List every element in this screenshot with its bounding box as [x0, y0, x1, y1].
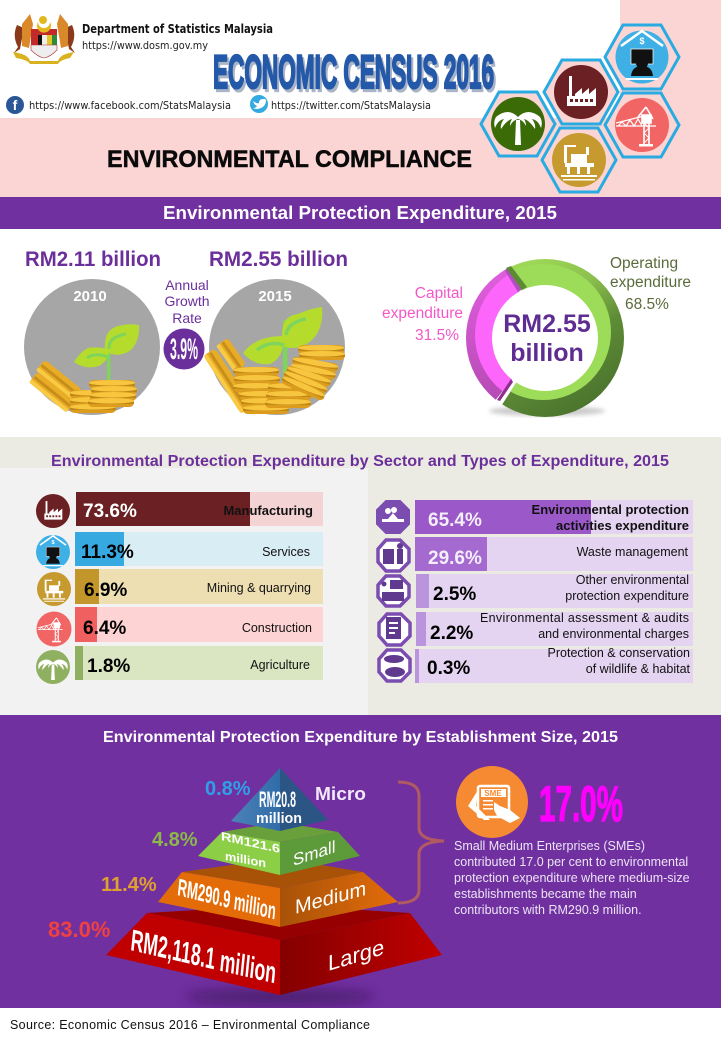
text block: SME summary: establishments became the main	[454, 887, 637, 901]
label: operating expenditure: Operating	[610, 255, 678, 272]
panel: 2010 expenditure	[24, 248, 161, 415]
callout: annual growth rate	[164, 277, 210, 370]
icon: services hexagon	[605, 25, 679, 89]
bar: environmental protection activities: activities expenditure	[556, 518, 689, 533]
bar: other environmental protection: protection expenditure	[565, 589, 689, 603]
panel: 2015 expenditure: 2015	[258, 288, 292, 305]
label: micro: Micro	[315, 784, 366, 804]
bar: agriculture: 1.8%	[87, 656, 130, 677]
icon: palm hexagon	[481, 92, 555, 156]
icon: coins 2010	[29, 359, 137, 413]
bar: manufacturing: 73.6%	[83, 501, 137, 522]
bar: assessment audits and charges	[379, 611, 693, 646]
pyramid tier: micro: RM20.8	[259, 787, 296, 812]
donut centre label: billion	[510, 339, 584, 367]
pyramid tier: micro: million	[256, 810, 302, 827]
text block: SME summary	[454, 839, 690, 917]
icon: SME tablet: SME	[484, 789, 502, 798]
text block: SME summary: contributed 17.0 per cent to environmental	[454, 855, 688, 869]
bar: construction: 6.4%	[83, 618, 126, 639]
text: department name	[82, 22, 273, 52]
source note: Source: Economic Census 2016 – Environmental Compliance	[10, 1018, 370, 1032]
chart: expenditure by sector	[36, 492, 323, 684]
label: operating expenditure: 68.5%	[625, 296, 669, 313]
bar: environmental protection activities	[377, 500, 693, 534]
pyramid tier: small: RM121.6	[221, 829, 280, 856]
bar: waste management: Waste management	[577, 545, 689, 559]
callout: annual growth rate: Growth	[164, 293, 210, 309]
bar: services: Services	[262, 545, 310, 559]
pyramid tier: micro	[231, 768, 328, 831]
bar: manufacturing	[36, 492, 323, 528]
bar: agriculture	[36, 646, 323, 684]
donut segment: capital expenditure	[466, 269, 520, 400]
bar: mining and quarrying	[37, 569, 323, 606]
label: operating expenditure	[610, 255, 691, 313]
pyramid tier: large	[106, 905, 442, 995]
text block: SME summary: protection expenditure where medium-size	[454, 871, 690, 885]
background: header white and pink	[0, 0, 721, 437]
title: Economic Census 2016	[213, 45, 496, 101]
text: facebook url: https://www.facebook.com/StatsMalaysia	[29, 99, 231, 112]
label: percent small: 4.8%	[152, 829, 198, 851]
label: percent large: 83.0%	[48, 917, 110, 942]
arrow: brace grouping SMEs	[398, 782, 444, 903]
pyramid tier: small: Small	[293, 836, 335, 870]
label: percent micro: 0.8%	[205, 778, 251, 800]
icon: facebook: f	[13, 97, 18, 113]
panel: establishment size background	[0, 715, 721, 1008]
text block: SME summary: contributors with RM290.9 million.	[454, 903, 642, 917]
chart: pyramid by establishment size	[48, 768, 442, 1005]
icon: sprout 2015	[243, 307, 322, 380]
panel: 2015 expenditure: RM2.55 billion	[209, 248, 348, 271]
icon: sprout 2010	[74, 324, 139, 385]
bar: other environmental protection: Other environmental	[576, 573, 689, 587]
callout: annual growth rate: Rate	[172, 310, 202, 326]
bar: manufacturing: Manufacturing	[223, 503, 313, 518]
bar: agriculture: Agriculture	[250, 658, 310, 672]
bar: assessment audits and charges: and environmental charges	[538, 627, 689, 641]
text block: SME summary: Small Medium Enterprises (SMEs)	[454, 839, 645, 853]
bar: other environmental protection	[378, 573, 693, 608]
panel: 2010 expenditure: RM2.11 billion	[25, 248, 161, 271]
text: department name: Department of Statistics Malaysia	[82, 22, 273, 36]
chart: expenditure by type	[377, 500, 693, 683]
heading: by sector and types: Environmental Protection Expenditure by Sector and Types of Expenditure, 2015	[51, 453, 669, 470]
icon: facebook	[6, 96, 24, 114]
bar: waste management: 29.6%	[428, 548, 482, 569]
bar: construction: Construction	[242, 621, 312, 635]
bar: wildlife and habitat	[379, 646, 693, 683]
callout: annual growth rate: Annual	[165, 277, 209, 293]
donut centre label: RM2.55	[503, 310, 591, 338]
pyramid tier: small	[198, 822, 360, 875]
label: capital expenditure: 31.5%	[415, 327, 459, 344]
bar: environmental protection activities: 65.4%	[428, 510, 482, 531]
heading: by establishment size: Environmental Protection Expenditure by Establishment Size, 2015	[103, 729, 618, 746]
bar: construction	[36, 607, 323, 646]
banner: Environmental Protection Expenditure, 2015	[0, 197, 721, 229]
bar: waste management	[378, 537, 693, 571]
panel: 2015 expenditure	[203, 248, 348, 415]
bar: assessment audits and charges: Environmental assessment & audits	[480, 611, 689, 625]
label: capital expenditure: Capital	[415, 285, 463, 302]
bar: assessment audits and charges: 2.2%	[430, 623, 473, 644]
icon: mining hexagon	[542, 128, 616, 192]
icon: SME tablet	[456, 766, 528, 838]
icon: construction hexagon	[605, 93, 679, 157]
banner: Environmental Protection Expenditure, 2015: Environmental Protection Expenditure, 2015	[163, 203, 557, 223]
bar: wildlife and habitat: of wildlife & habitat	[586, 662, 691, 676]
pyramid tier: large: RM2,118.1 million	[129, 923, 278, 990]
label: capital expenditure: expenditure	[382, 305, 463, 322]
bar: mining and quarrying: 6.9%	[84, 580, 127, 601]
label: operating expenditure: expenditure	[610, 274, 691, 291]
donut centre label	[503, 310, 591, 367]
icon: twitter	[250, 95, 268, 113]
stat: 17.0%: 17.0%	[539, 776, 623, 832]
pyramid tier: medium	[158, 858, 398, 927]
bar: services: 11.3%	[81, 542, 134, 563]
icon: factory hexagon	[544, 60, 618, 124]
label: percent medium: 11.4%	[101, 874, 157, 896]
bar: wildlife and habitat: 0.3%	[427, 658, 470, 679]
bar: other environmental protection: 2.5%	[433, 584, 476, 605]
label: capital expenditure	[382, 285, 463, 344]
bar: environmental protection activities: Environmental protection	[532, 502, 689, 517]
icon cluster: sector hexagons	[481, 25, 679, 192]
text: department name: https://www.dosm.gov.my	[82, 39, 208, 52]
donut segment: operating expenditure	[502, 259, 624, 417]
chart: donut capital vs operating	[466, 259, 624, 417]
logo: national crest	[13, 14, 75, 64]
pyramid tier: medium: Medium	[295, 878, 366, 919]
pyramid tier: large: Large	[328, 935, 384, 976]
panel: 2010 expenditure: 2010	[73, 288, 107, 305]
pyramid tier: small: million	[225, 849, 266, 870]
icon: coins 2015	[203, 338, 345, 414]
bar: mining and quarrying: Mining & quarrying	[207, 581, 311, 595]
heading: environmental compliance: ENVIRONMENTAL COMPLIANCE	[107, 146, 472, 173]
pyramid tier: medium: RM290.9 million	[176, 874, 277, 925]
bar: wildlife and habitat: Protection & conservation	[548, 646, 690, 660]
panel backgrounds: sector and type	[0, 437, 721, 715]
text: twitter url: https://twitter.com/StatsMalaysia	[271, 99, 431, 112]
bar: services	[36, 532, 323, 569]
callout: annual growth rate: 3.9%	[170, 333, 198, 366]
